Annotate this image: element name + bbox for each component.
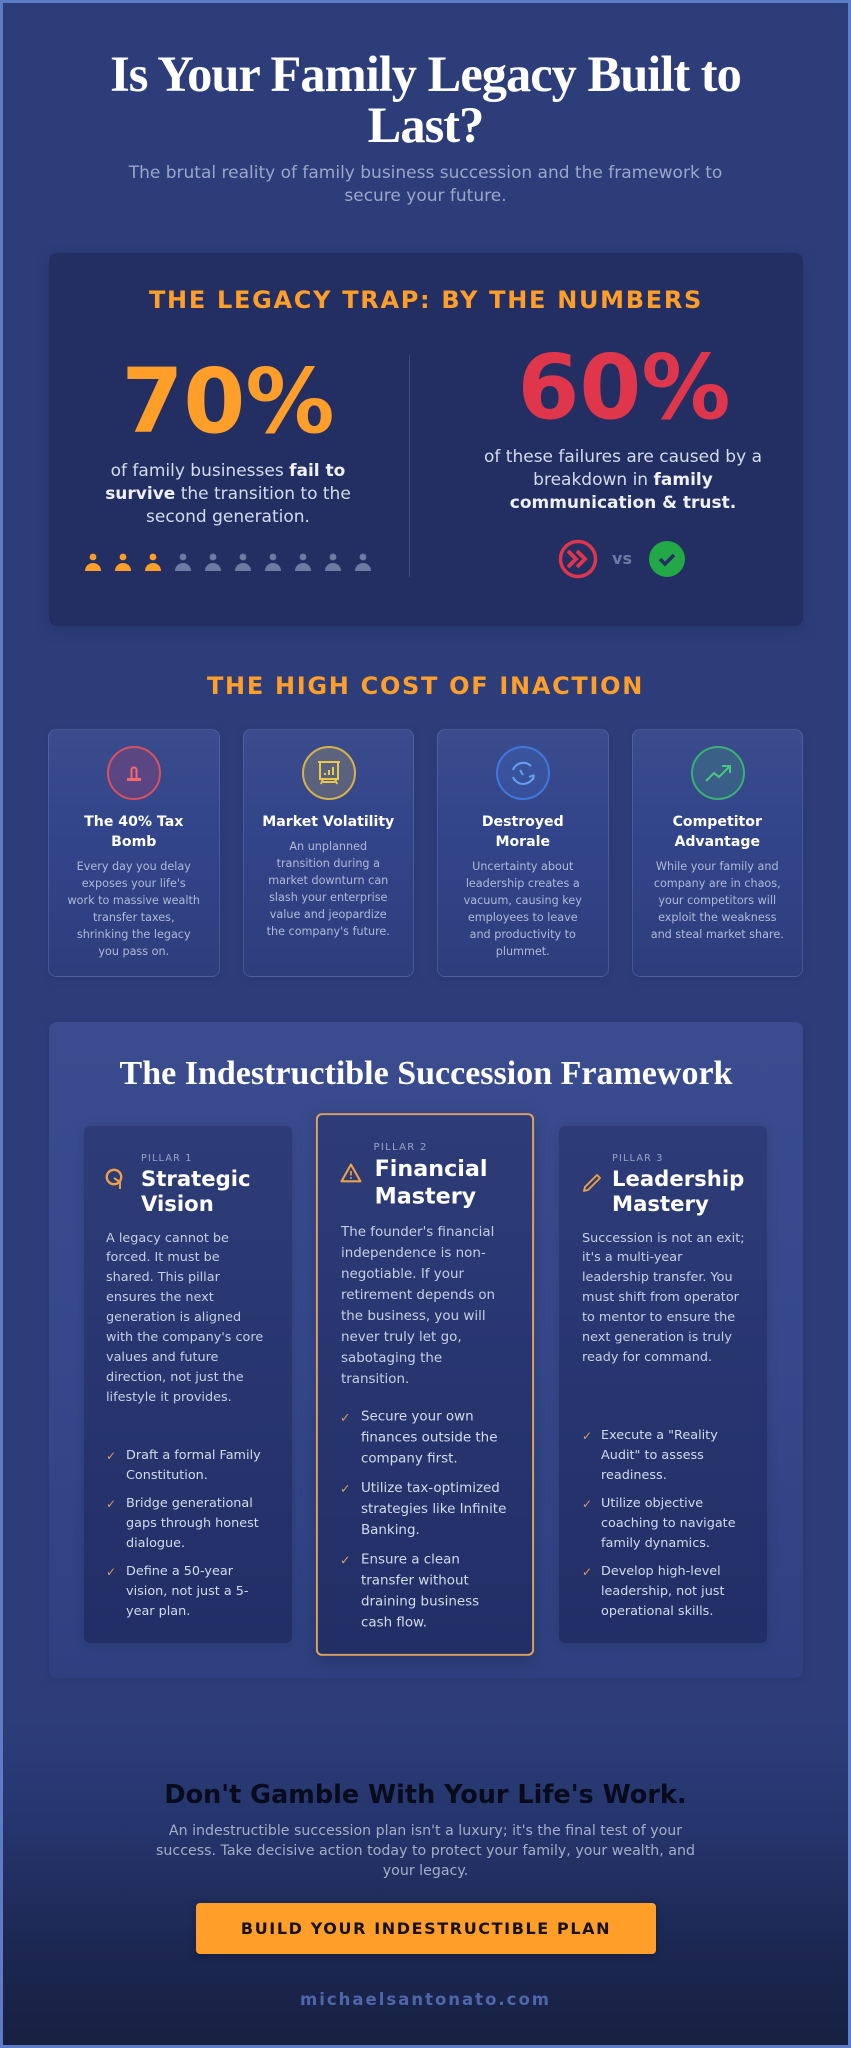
label: PILLAR 2 xyxy=(374,1141,428,1153)
card title: Competitor xyxy=(673,814,762,830)
heading: legacy trap: THE LEGACY TRAP: BY THE NUMBERS xyxy=(149,286,703,314)
pillar text: it's a multi-year xyxy=(582,1250,682,1265)
card text: the company's future. xyxy=(267,925,390,938)
footer gradient background xyxy=(0,1715,851,2048)
subtitle: secure your future. xyxy=(344,186,507,206)
icon: check in green circle xyxy=(649,541,685,577)
icon: presentation chart xyxy=(302,746,356,800)
card text: Every day you delay xyxy=(77,860,191,873)
pillar title: Mastery xyxy=(375,1182,476,1209)
pillar text: the business, you will xyxy=(341,1308,486,1324)
item: dialogue. xyxy=(126,1536,185,1551)
pillar text: generation is aligned xyxy=(106,1310,241,1325)
check mark: ✓ xyxy=(582,1497,592,1511)
text: call to action: An indestructible succession plan isn't a luxury; it's the final test of your xyxy=(169,1823,682,1839)
card text: your competitors will xyxy=(658,894,776,907)
item: finances outside the xyxy=(361,1430,497,1446)
pillar title: Mastery xyxy=(612,1191,709,1216)
card text: Uncertainty about xyxy=(472,860,573,873)
item: transfer without xyxy=(361,1573,469,1589)
item: Constitution. xyxy=(126,1468,208,1483)
check mark: ✓ xyxy=(106,1449,116,1463)
text: 60 percent description: breakdown in family xyxy=(533,470,713,490)
card text: leadership creates a xyxy=(466,877,580,890)
card title xyxy=(84,814,184,850)
checklist xyxy=(106,1448,261,1619)
card text: An unplanned xyxy=(289,840,367,853)
item xyxy=(361,1409,497,1467)
item: Draft a formal Family xyxy=(126,1448,261,1463)
card text: value and jeopardize xyxy=(270,908,387,921)
card text: While your family and xyxy=(656,860,779,873)
pillar text: with the company's core xyxy=(106,1330,263,1345)
item: gaps through honest xyxy=(126,1516,259,1531)
item xyxy=(361,1552,479,1631)
card text xyxy=(651,860,784,941)
check mark: ✓ xyxy=(582,1565,592,1579)
card text xyxy=(464,860,582,958)
footer: website: michaelsantonato.com xyxy=(300,1990,551,2009)
heading: call to action: Don't Gamble With Your Life's Work. xyxy=(164,1780,687,1810)
icon: warning triangle xyxy=(340,1163,362,1182)
item: Bridge generational xyxy=(126,1496,253,1511)
text: call to action: success. Take decisive action today to protect your family, your wealth, and xyxy=(156,1843,695,1859)
item: readiness. xyxy=(601,1468,667,1483)
title xyxy=(110,46,741,152)
pillar text xyxy=(340,1224,495,1387)
pillar text: retirement depends on xyxy=(341,1287,495,1303)
item: Secure your own xyxy=(361,1409,474,1425)
card title: Bomb xyxy=(111,834,156,850)
card text: transfer taxes, xyxy=(93,911,175,924)
item xyxy=(126,1564,249,1619)
pillar text: direction, not just the xyxy=(106,1370,244,1385)
card title: Morale xyxy=(495,834,550,850)
card text xyxy=(68,860,200,958)
pillar text: independence is non- xyxy=(341,1245,486,1261)
label: PILLAR 1 xyxy=(141,1153,193,1164)
pillar text: never truly let go, xyxy=(341,1329,462,1345)
title: Last? xyxy=(368,96,483,152)
card text: work to massive wealth xyxy=(68,894,200,907)
card text: plummet. xyxy=(496,945,550,958)
item xyxy=(601,1428,718,1483)
card title xyxy=(482,814,564,850)
pillar text: values and future xyxy=(106,1350,218,1365)
item: year plan. xyxy=(126,1604,190,1619)
pillar text: next generation is truly xyxy=(582,1330,732,1345)
stat: 70 percent: 70% xyxy=(121,349,335,453)
item: company first. xyxy=(361,1451,458,1467)
panel: the indestructible succession framework xyxy=(49,1022,803,1678)
check mark: ✓ xyxy=(106,1565,116,1579)
pillar text: transition. xyxy=(341,1371,409,1387)
card text: company are in chaos, xyxy=(654,877,781,890)
item: coaching to navigate xyxy=(601,1516,736,1531)
icon: pencil xyxy=(583,1174,601,1192)
item: Ensure a clean xyxy=(361,1552,460,1568)
check mark: ✓ xyxy=(340,1482,351,1496)
card: destroyed morale xyxy=(437,729,608,977)
item: cash flow. xyxy=(361,1615,427,1631)
text: 60 percent description: communication & trust. xyxy=(510,492,736,512)
pillar text: negotiable. If your xyxy=(341,1266,464,1282)
pillar title: Leadership xyxy=(612,1166,744,1191)
divider xyxy=(409,355,410,577)
pillar text: A legacy cannot be xyxy=(106,1230,229,1246)
item xyxy=(601,1496,736,1551)
item xyxy=(126,1496,259,1551)
text: 60 percent description xyxy=(484,446,762,512)
item xyxy=(601,1564,724,1619)
card title: Destroyed xyxy=(482,814,564,830)
pillar title xyxy=(612,1166,744,1216)
label: vs: vs xyxy=(612,549,632,568)
card text: slash your enterprise xyxy=(269,891,387,904)
pillar 1: strategic vision xyxy=(84,1126,292,1643)
item: Define a 50-year xyxy=(126,1564,233,1579)
item: Utilize tax-optimized xyxy=(361,1481,500,1496)
pillar text: ensures the next xyxy=(106,1290,214,1305)
pillar title: Vision xyxy=(141,1191,214,1216)
label: PILLAR 3 xyxy=(612,1153,664,1164)
icon: trending up xyxy=(691,746,745,800)
icon: cycle clock xyxy=(496,746,550,800)
pillar title xyxy=(375,1155,488,1209)
button: build your plan xyxy=(196,1903,656,1954)
pillar text: sabotaging the xyxy=(341,1350,442,1366)
card: competitor advantage xyxy=(632,729,803,977)
text: call to action xyxy=(156,1823,695,1879)
card text: transition during a xyxy=(277,857,380,870)
item: Execute a "Reality xyxy=(601,1428,718,1443)
card: the 40 percent tax bomb xyxy=(48,729,220,977)
card: market volatility xyxy=(242,729,414,977)
title: Is Your Family Legacy Built to xyxy=(110,46,741,102)
pillar text: The founder's financial xyxy=(341,1224,494,1240)
card text: and steal market share. xyxy=(651,928,784,941)
card text: exploit the weakness xyxy=(658,911,776,924)
text: 70 percent description xyxy=(105,460,351,526)
pillar text: shared. This pillar xyxy=(106,1270,220,1285)
check mark: ✓ xyxy=(582,1429,592,1443)
card title: Advantage xyxy=(674,834,760,850)
card text: market downturn can xyxy=(268,874,388,887)
item xyxy=(126,1448,261,1483)
subtitle xyxy=(128,163,722,206)
text: 70 percent description: survive the transition to the xyxy=(105,484,351,504)
pillar 2: financial mastery xyxy=(316,1113,534,1656)
text: 70 percent description: of family businesses fail to xyxy=(111,460,345,480)
heading: framework: The Indestructible Succession Framework xyxy=(120,1055,732,1092)
pillar text: ready for command. xyxy=(582,1350,712,1365)
pillar text: leadership transfer. You xyxy=(582,1270,733,1285)
pillar text: lifestyle it provides. xyxy=(106,1390,232,1405)
card text: vacuum, causing key xyxy=(464,894,582,907)
item: Audit" to assess xyxy=(601,1448,704,1463)
item xyxy=(361,1481,506,1538)
panel: the legacy trap by the numbers xyxy=(49,253,803,626)
card title: The 40% Tax xyxy=(84,814,183,830)
card text: you pass on. xyxy=(98,945,169,958)
icon: target xyxy=(106,1168,122,1189)
pillar text: Succession is not an exit; xyxy=(582,1230,745,1246)
item: Develop high-level xyxy=(601,1564,721,1579)
check mark: ✓ xyxy=(340,1410,351,1425)
pillar title: Strategic xyxy=(141,1166,251,1191)
pillar text xyxy=(106,1230,263,1405)
checklist xyxy=(340,1409,506,1631)
heading: high cost of inaction: THE HIGH COST OF INACTION xyxy=(207,672,644,700)
card text: employees to leave xyxy=(468,911,578,924)
item: draining business xyxy=(361,1594,479,1610)
card text: exposes your life's xyxy=(82,877,186,890)
icon: stamp xyxy=(107,746,161,800)
card text xyxy=(266,840,390,938)
item: Utilize objective xyxy=(601,1496,703,1511)
button: build your plan: BUILD YOUR INDESTRUCTIBLE PLAN xyxy=(241,1919,611,1938)
card text: and productivity to xyxy=(470,928,576,941)
pillar text xyxy=(582,1230,745,1365)
pillar title: Financial xyxy=(375,1155,488,1181)
check mark: ✓ xyxy=(106,1497,116,1511)
item: operational skills. xyxy=(601,1604,713,1619)
pillar text: forced. It must be xyxy=(106,1250,220,1265)
pillar 3: leadership mastery xyxy=(559,1126,767,1643)
item: strategies like Infinite xyxy=(361,1502,506,1517)
item: vision, not just a 5- xyxy=(126,1584,249,1599)
card text: shrinking the legacy xyxy=(77,928,191,941)
item: Banking. xyxy=(361,1523,420,1538)
text: 70 percent description: second generation. xyxy=(146,506,310,526)
card title: Market Volatility xyxy=(262,814,394,830)
stat: 60 percent: 60% xyxy=(517,335,731,439)
subtitle: The brutal reality of family business succession and the framework to xyxy=(129,163,722,183)
item: family dynamics. xyxy=(601,1536,710,1551)
check mark: ✓ xyxy=(340,1553,351,1568)
icon: chevrons in red circle xyxy=(558,540,598,578)
pillar text: to mentor to ensure the xyxy=(582,1310,735,1325)
pillar title xyxy=(141,1166,251,1216)
card title xyxy=(673,814,762,850)
text: 60 percent description: of these failures are caused by a xyxy=(484,446,762,466)
checklist xyxy=(582,1428,736,1619)
text: call to action: your legacy. xyxy=(383,1863,468,1879)
item: leadership, not just xyxy=(601,1584,724,1599)
pillar text: must shift from operator xyxy=(582,1290,739,1305)
icon row: ten people, three highlighted xyxy=(85,554,371,571)
